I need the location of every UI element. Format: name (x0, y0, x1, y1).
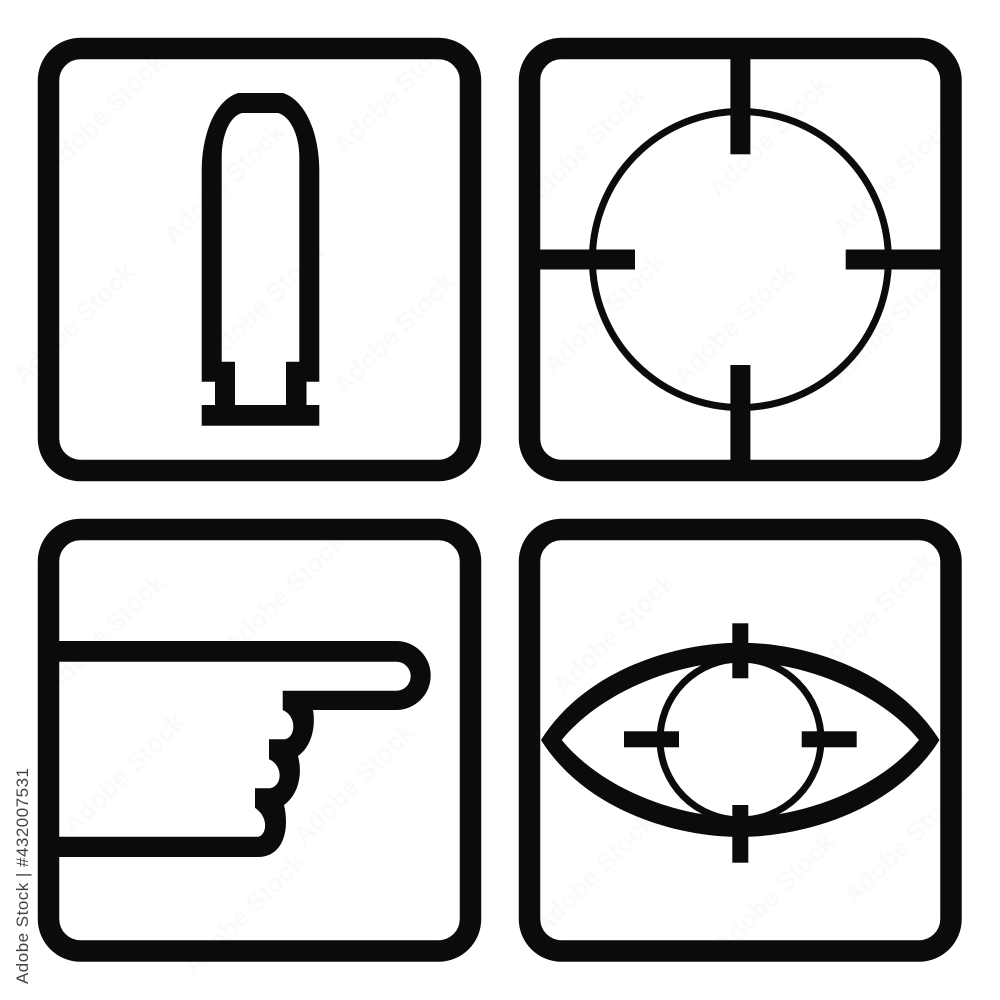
watermark pattern: Adobe Stock (57, 706, 191, 840)
icon: pointing hand (55, 641, 431, 857)
watermark pattern: Adobe Stock (217, 526, 351, 660)
watermark pattern: Adobe Stock (517, 79, 651, 213)
panel: bullet (48, 48, 470, 470)
watermark pattern: Adobe Stock (547, 566, 681, 700)
watermark pattern: Adobe Stock (157, 116, 291, 250)
watermark pattern: Adobe Stock (177, 846, 311, 980)
watermark pattern: Adobe Stock (37, 566, 171, 700)
watermark pattern: Adobe Stock (197, 236, 331, 370)
panel frame: bullet (48, 48, 470, 470)
watermark pattern: Adobe Stock (527, 806, 661, 940)
icon: bullet (202, 93, 319, 426)
watermark pattern: Adobe Stock (287, 716, 421, 850)
watermark pattern: Adobe Stock (702, 69, 836, 203)
icon: eye target ticks (624, 623, 857, 863)
icon: crosshair ticks (537, 56, 944, 463)
watermark pattern: Adobe Stock (667, 256, 801, 390)
watermark pattern: Adobe Stock (827, 109, 961, 243)
panel: eye target (530, 530, 951, 951)
watermark pattern: Adobe Stock (707, 826, 841, 960)
watermark pattern: Adobe Stock (37, 46, 171, 180)
icon: eye outline (541, 643, 940, 837)
panel: pointing hand (48, 530, 470, 951)
icon: crosshair circle (592, 112, 888, 408)
icon: eye target circle (660, 659, 821, 820)
watermark pattern: Adobe Stock (837, 776, 971, 910)
panel: crosshair (530, 48, 951, 470)
watermark pattern: Adobe Stock (7, 256, 141, 390)
panel frame: crosshair (530, 48, 951, 470)
watermark pattern: Adobe Stock (537, 246, 671, 380)
watermark pattern: Adobe Stock (327, 266, 461, 400)
panel frame: eye target (530, 530, 951, 951)
panel frame: pointing hand (48, 530, 470, 951)
watermark pattern: Adobe Stock (807, 546, 941, 680)
watermark pattern: Adobe Stock (822, 256, 956, 390)
watermark pattern: Adobe Stock (327, 26, 461, 160)
stock id caption: Adobe Stock | #432007531 (13, 768, 32, 984)
